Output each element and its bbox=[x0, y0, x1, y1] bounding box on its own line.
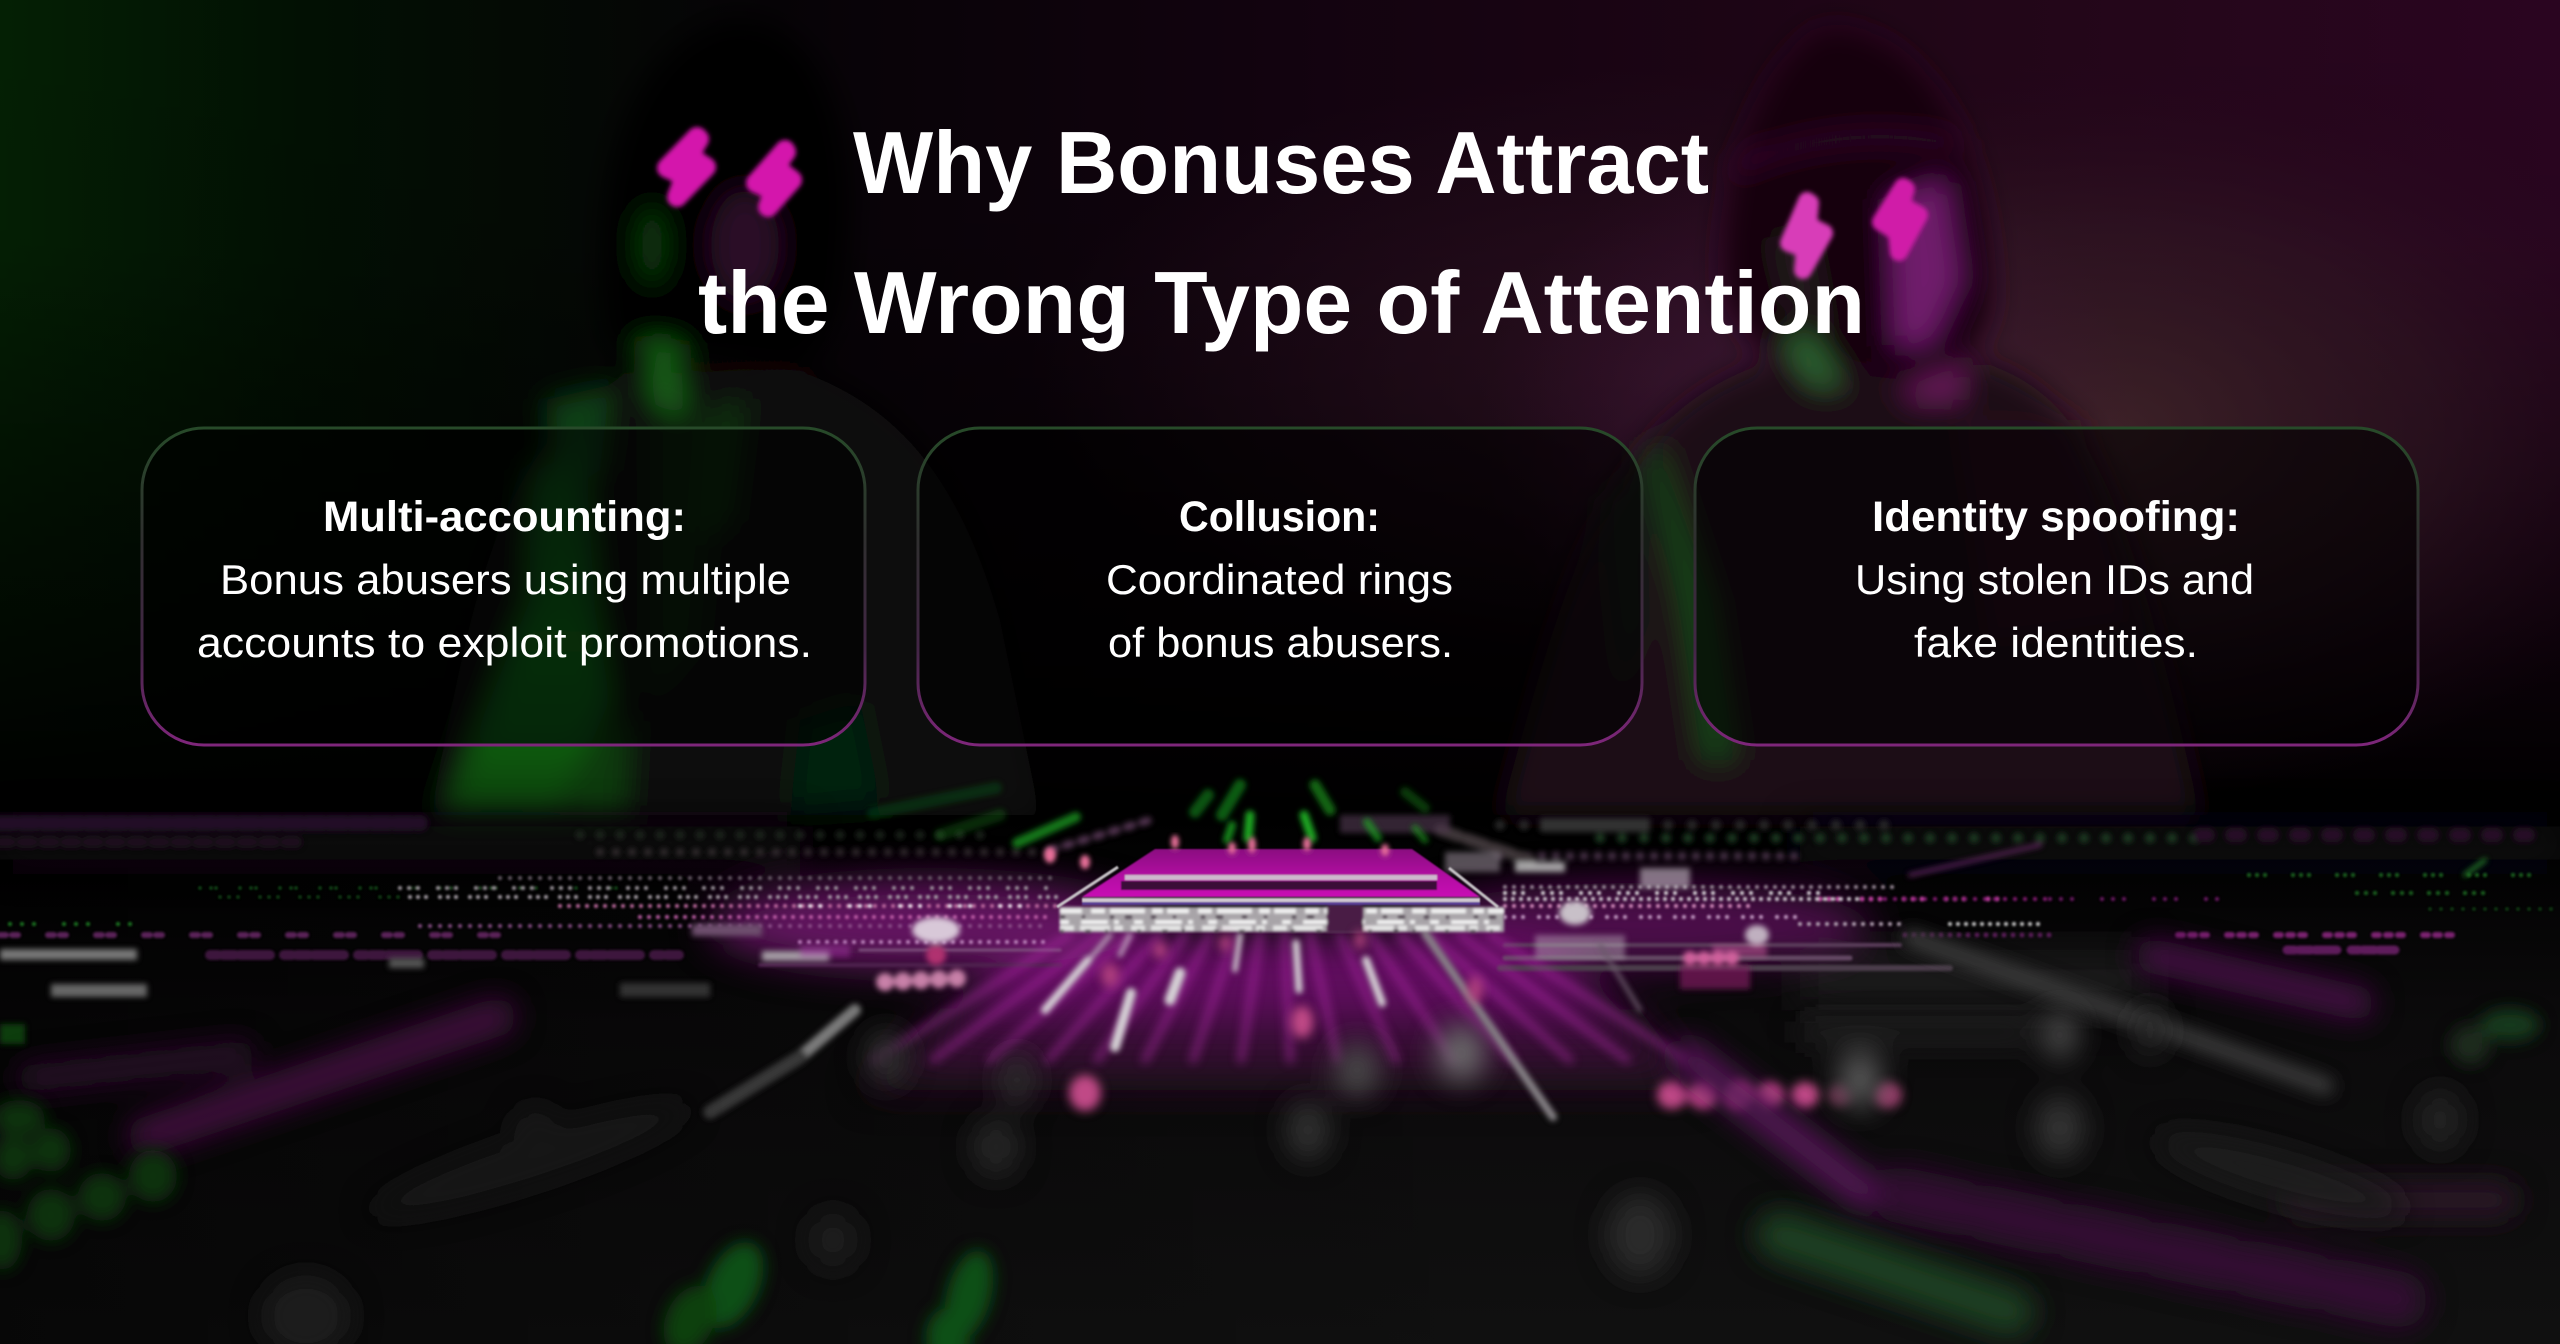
text: multi-accounting line 2: accounts to exploit promotions. bbox=[197, 619, 812, 666]
heading: identity spoofing: Identity spoofing: bbox=[1872, 493, 2240, 541]
text: identity spoofing line 1: Using stolen IDs and bbox=[1855, 556, 2254, 603]
green bokeh streak right bbox=[1780, 1235, 2010, 1312]
hooded figure right bbox=[1500, 30, 2200, 815]
icon: lightning eyes right figure bbox=[1789, 187, 1919, 270]
panel: identity spoofing bbox=[1695, 428, 2418, 745]
green light rays above chip bbox=[873, 785, 1425, 843]
grey diagonal trace right bbox=[1911, 938, 2325, 1086]
title line 1: Why Bonuses Attract bbox=[853, 113, 1709, 212]
white rays below chip bbox=[710, 933, 1640, 1117]
text: identity spoofing line 2: fake identities. bbox=[1914, 619, 2198, 666]
board blurred speckle band bbox=[0, 815, 2540, 1044]
text: collusion line 2: of bonus abusers. bbox=[1108, 619, 1453, 666]
heading: multi-accounting: Multi-accounting: bbox=[323, 493, 686, 541]
icon: lightning eyes left figure bbox=[667, 137, 792, 207]
board glow bands bbox=[0, 825, 2560, 1090]
hooded figure left bbox=[430, 23, 1040, 815]
purple rays below chip bbox=[875, 935, 1685, 1060]
panel: collusion bbox=[918, 428, 1642, 745]
title line 2: the Wrong Type of Attention bbox=[698, 253, 1865, 352]
title bbox=[698, 113, 1865, 352]
grey bokeh dots bbox=[260, 1006, 2464, 1344]
circuit board bbox=[0, 785, 2560, 1344]
chip bbox=[1044, 835, 1504, 933]
board dot rows bbox=[0, 875, 2560, 968]
green bokeh dots bbox=[0, 1009, 2540, 1344]
purple bokeh streaks bbox=[32, 956, 2500, 1300]
panel: multi-accounting bbox=[142, 428, 865, 745]
heading: collusion: Collusion: bbox=[1179, 493, 1380, 541]
text: multi-accounting line 1: Bonus abusers using multiple bbox=[220, 556, 791, 603]
text: collusion line 1: Coordinated rings bbox=[1106, 556, 1453, 603]
pink bokeh dots bbox=[1069, 931, 1902, 1111]
